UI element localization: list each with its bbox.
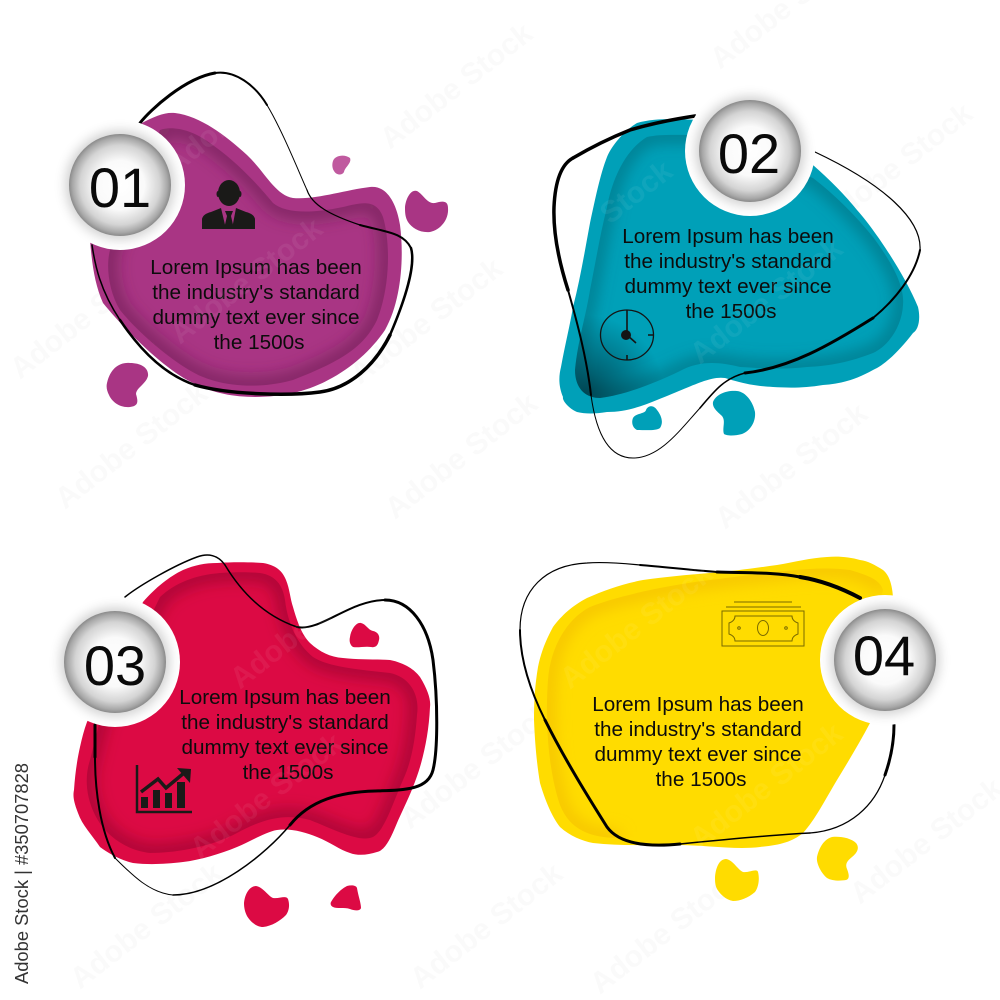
stock id side text: Adobe Stock | #350707828 bbox=[12, 763, 32, 984]
text 1: the industry's standard bbox=[152, 281, 360, 304]
splash 3a bbox=[350, 623, 379, 647]
badge 01: 01 bbox=[89, 156, 151, 219]
watermark: background repeating stock text: Adobe Stock bbox=[814, 96, 979, 236]
badge 04 bbox=[820, 595, 950, 725]
blob 3 outer bbox=[73, 562, 430, 864]
watermark: background repeating stock text: Adobe Stock bbox=[49, 376, 214, 516]
watermark: background repeating stock text: Adobe Stock bbox=[379, 386, 544, 526]
splash 1a bbox=[332, 156, 350, 175]
splash 2b bbox=[713, 391, 755, 436]
badge 03 bbox=[50, 597, 180, 727]
watermark: overlay on shapes: Adobe Stock bbox=[164, 211, 329, 351]
text 4: the 1500s bbox=[656, 768, 746, 791]
curve line 3 bbox=[95, 555, 437, 895]
watermark: overlay on shapes: Adobe bbox=[159, 97, 253, 181]
text 1: dummy text ever since bbox=[153, 306, 359, 329]
blob 1 outer bbox=[90, 113, 402, 397]
watermark: background repeating stock text: Adobe Stock bbox=[404, 856, 569, 996]
watermark: overlay on shapes bbox=[159, 97, 849, 866]
badge 02: 02 bbox=[718, 122, 780, 185]
watermark: overlay on shapes: Adobe Stock bbox=[684, 716, 849, 856]
badge 02 bbox=[685, 86, 815, 216]
watermark: overlay on shapes: Adobe Stock bbox=[184, 726, 349, 866]
text 3: the 1500s bbox=[243, 761, 333, 784]
watermark: background repeating stock text: Adobe Stock bbox=[394, 696, 559, 836]
text 2: the industry's standard bbox=[624, 250, 832, 273]
curve line 1 bbox=[92, 73, 412, 394]
curve line 2 bbox=[554, 116, 920, 458]
text 3: dummy text ever since bbox=[182, 736, 388, 759]
splash 1b bbox=[405, 191, 448, 232]
text 4: dummy text ever since bbox=[595, 743, 801, 766]
splash 1c bbox=[107, 363, 148, 407]
watermark: overlay on shapes: Stock bbox=[594, 154, 679, 231]
watermark: overlay on shapes: Adobe Stock bbox=[554, 556, 719, 696]
text 4: Lorem Ipsum has been bbox=[592, 693, 804, 716]
blob 4 inner shadow bbox=[547, 568, 883, 838]
blob 3 inner shadow bbox=[87, 572, 418, 853]
panel 3: crimson bbox=[73, 555, 437, 927]
watermark: background repeating stock text: Adobe Stock bbox=[709, 396, 874, 536]
splash 4b bbox=[817, 837, 858, 881]
splash 2a bbox=[632, 406, 662, 430]
blob 2 outer bbox=[559, 119, 919, 414]
watermark: background repeating stock text: Adobe Stock bbox=[374, 16, 539, 156]
text 3: the industry's standard bbox=[181, 711, 389, 734]
badge 04: 04 bbox=[853, 624, 915, 687]
icon: businessman bbox=[202, 180, 255, 229]
text 2: Lorem Ipsum has been bbox=[622, 225, 834, 248]
text 2: the 1500s bbox=[686, 300, 776, 323]
icon: growth chart bbox=[137, 765, 192, 812]
watermark: overlay on shapes: Adobe Stock bbox=[684, 231, 849, 371]
text 2: dummy text ever since bbox=[625, 275, 831, 298]
watermark: overlay on shapes: Adobe Stock bbox=[224, 556, 389, 696]
watermark: background repeating stock text: Adobe Stock bbox=[64, 856, 229, 996]
panel 4: yellow bbox=[520, 557, 894, 901]
blob 1 inner shadow bbox=[108, 128, 388, 386]
watermark: background repeating stock text: Adobe Stock bbox=[584, 861, 749, 1000]
badge 01 bbox=[55, 120, 185, 250]
text 1: the 1500s bbox=[214, 331, 304, 354]
panel 1: purple bbox=[90, 73, 448, 407]
icon: banknote bbox=[722, 602, 804, 646]
badge 03: 03 bbox=[84, 634, 146, 697]
blob 4 outer bbox=[534, 557, 893, 848]
splash 4a bbox=[715, 859, 759, 901]
watermark: background repeating stock text: Adobe Stock bbox=[344, 251, 509, 391]
text 3: Lorem Ipsum has been bbox=[179, 686, 391, 709]
blob 2 inner shadow bbox=[560, 135, 903, 410]
panel 2: teal bbox=[554, 116, 920, 458]
splash 3c bbox=[331, 885, 361, 910]
splash 3b bbox=[244, 886, 289, 927]
text 4: the industry's standard bbox=[594, 718, 802, 741]
curve line 4 bbox=[520, 563, 894, 845]
icon: clock bbox=[600, 310, 654, 360]
watermark: background repeating stock text: Adobe Stock bbox=[4, 246, 169, 386]
text 1: Lorem Ipsum has been bbox=[150, 256, 362, 279]
